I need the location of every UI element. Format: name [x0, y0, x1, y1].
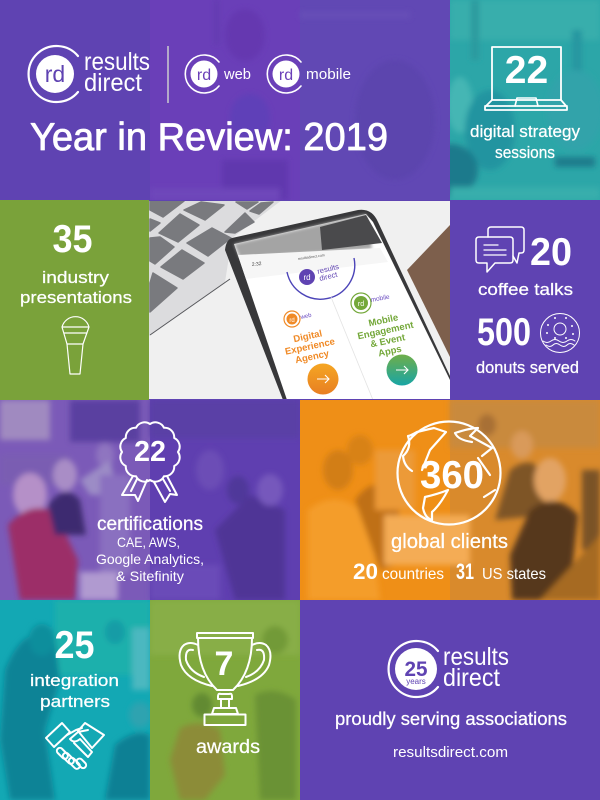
phone screen content: Engagement — [357, 320, 415, 342]
logo: 25 years results direct: 25 — [404, 658, 428, 681]
label: certifications: certifications — [97, 514, 203, 535]
phone screen content: web — [299, 313, 313, 321]
panel: integration partners — [0, 600, 151, 800]
logo: results direct: direct — [84, 69, 142, 97]
wood table — [407, 225, 450, 357]
stat: 500: 500 — [477, 311, 531, 354]
panel: awards — [150, 600, 300, 800]
panel: certifications — [0, 400, 300, 600]
logo: 25 years results direct: direct — [443, 664, 500, 692]
stat: 25: 25 — [54, 624, 94, 667]
icon: laptop — [485, 47, 567, 110]
logo: rd mobile: rd — [279, 67, 293, 84]
phone screen content: Mobile — [368, 312, 399, 329]
phone screen content: Apps — [377, 344, 403, 359]
panel: coffee talks and donuts — [450, 200, 600, 400]
keyboard keys — [150, 201, 273, 312]
stat: 31 US states: US states — [482, 566, 546, 583]
text: certification list — [96, 534, 204, 584]
stat: 20 countries: countries — [382, 566, 444, 583]
logo: rd mobile: mobile — [306, 66, 351, 83]
label: awards: awards — [196, 737, 260, 758]
panel: header — [27, 0, 410, 200]
icon: chat bubbles — [476, 227, 524, 272]
phone — [225, 210, 450, 400]
logo: results direct: results — [84, 48, 150, 76]
text: certification list: CAE, AWS, — [117, 534, 180, 550]
panel: industry presentations — [0, 200, 149, 400]
label: integration partners: partners — [40, 692, 110, 711]
icon: rosette with 22: 22 — [134, 436, 166, 468]
phone screen content: rd — [289, 318, 295, 324]
icon: rosette with 22 — [120, 422, 180, 502]
phone screen content: rd — [303, 273, 311, 282]
phone screen content: results — [316, 262, 340, 276]
logo: 25 years results direct: years — [406, 677, 426, 686]
label: industry presentations: presentations — [20, 288, 132, 307]
stat: 20: 20 — [530, 231, 572, 274]
label: coffee talks: coffee talks — [478, 280, 573, 299]
icon: laptop: 22 — [505, 49, 548, 92]
phone screen content: direct — [318, 270, 339, 283]
panel: footer — [300, 600, 600, 800]
phone screen content: mobile — [370, 294, 391, 304]
phone screen content: rd — [358, 301, 364, 308]
phone screen content — [252, 253, 420, 400]
text: certification list: Google Analytics, — [96, 551, 204, 567]
panel: global clients — [300, 400, 600, 600]
logo: rd web: rd — [197, 67, 211, 84]
label: global clients: global clients — [391, 531, 508, 553]
icon: microphone — [62, 317, 89, 374]
logo: rd web: web — [223, 66, 251, 83]
logo: rd web — [185, 55, 251, 93]
label: industry presentations: industry — [42, 268, 110, 287]
phone screen content: resultsdirect.com — [298, 253, 325, 261]
stat: 20 countries — [353, 559, 444, 584]
label: integration partners — [30, 671, 119, 711]
panel: digital strategy sessions — [450, 0, 600, 200]
phone screen content: Experience — [284, 336, 336, 358]
title: Year in Review: 2019 — [30, 116, 388, 159]
icon: donut — [540, 314, 580, 352]
logo: 25 years results direct: results — [443, 643, 509, 671]
website: resultsdirect.com — [393, 744, 508, 761]
text: certification list: & Sitefinity — [116, 568, 184, 584]
logo: results direct: rd — [45, 61, 65, 87]
stat: 20 countries: 20 — [353, 559, 378, 584]
stat: 31 US states: 31 — [456, 559, 474, 584]
logo: rd mobile — [267, 55, 351, 93]
laptop — [149, 200, 282, 336]
icon: trophy with 7: 7 — [215, 645, 233, 683]
icon: globe with 360: 360 — [420, 454, 484, 497]
phone screen content: Digital — [292, 328, 323, 345]
icon: trophy with 7 — [180, 633, 270, 725]
label: integration partners: integration — [30, 671, 119, 690]
label: industry presentations — [20, 268, 132, 307]
label: digital strategy sessions — [470, 122, 580, 162]
stat: 31 US states — [456, 559, 546, 584]
phone screen content: Agency — [294, 348, 331, 366]
logo: results direct — [29, 46, 150, 102]
icon: handshake — [46, 723, 104, 770]
label: digital strategy sessions: sessions — [495, 143, 555, 162]
label: digital strategy sessions: digital strategy — [470, 122, 580, 141]
phone screen content: 2:32 — [252, 261, 262, 268]
logo: 25 years results direct — [389, 641, 509, 697]
phone screen content: & Event — [369, 332, 407, 350]
tagline: proudly serving associations — [335, 708, 567, 729]
panel: phone photo — [149, 200, 450, 400]
icon: globe with 360 — [398, 422, 500, 524]
label: donuts served: donuts served — [476, 358, 579, 377]
stat: 35: 35 — [52, 218, 92, 261]
